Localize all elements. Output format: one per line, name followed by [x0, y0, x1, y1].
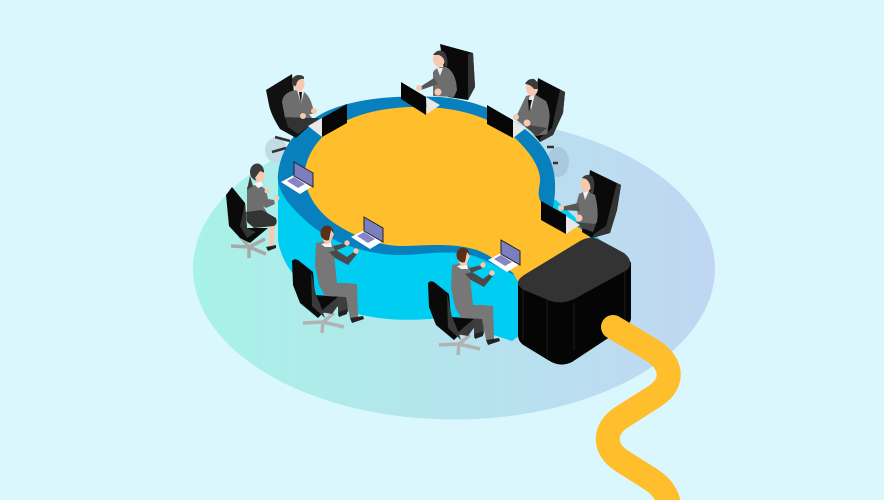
- laptop: back view top left: [308, 104, 347, 137]
- person: front left man: [292, 226, 364, 333]
- bulb socket: [518, 238, 631, 365]
- socket top: [518, 238, 630, 302]
- laptop: front view left: [281, 162, 313, 194]
- chair shadows: [265, 138, 569, 177]
- person: right woman: [558, 170, 621, 238]
- laptop: back view top centre: [401, 82, 440, 115]
- table rim: [278, 96, 592, 277]
- laptop: front view right: [488, 240, 520, 272]
- socket side: [518, 262, 631, 365]
- person: left woman: [226, 164, 280, 258]
- table top: [305, 107, 592, 285]
- person: front right man: [428, 248, 500, 355]
- floor ellipse: [193, 118, 715, 420]
- table: [278, 96, 600, 341]
- laptop: back view top right: [487, 105, 526, 138]
- person: top left man: [266, 74, 320, 152]
- laptop: back view right: [541, 201, 580, 234]
- cable start over socket: [613, 327, 640, 343]
- person: top centre woman: [416, 44, 475, 100]
- laptop: front view centre: [351, 217, 383, 249]
- cable: [608, 327, 671, 500]
- person: top right man: [513, 78, 565, 163]
- table side: [278, 175, 600, 341]
